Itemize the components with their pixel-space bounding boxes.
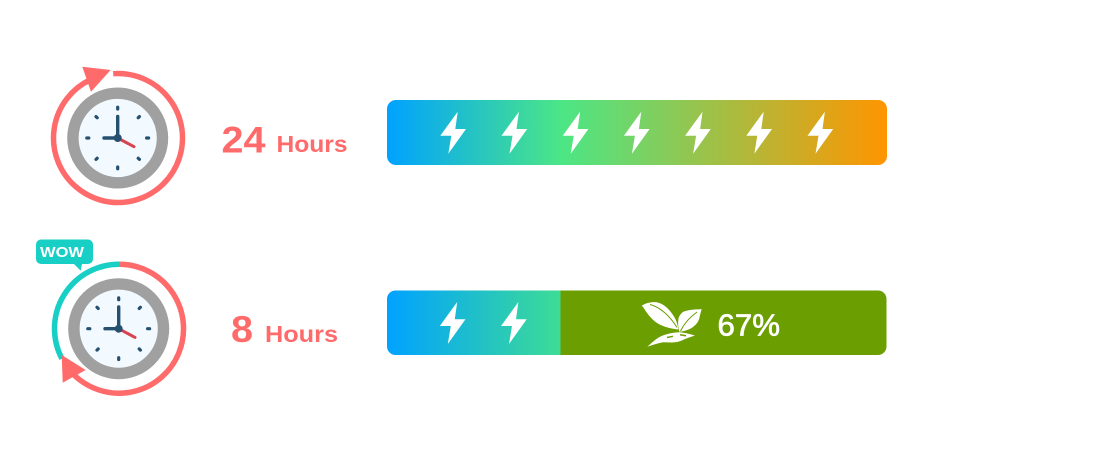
label: 8 Hours: Hours	[265, 321, 338, 347]
label: 24 Hours: Hours	[276, 131, 348, 157]
used energy segment	[387, 290, 561, 355]
label: 24 Hours: 24	[222, 118, 266, 160]
circular arrow ring	[54, 264, 184, 393]
label: 8 Hours	[231, 308, 338, 350]
saved energy segment	[560, 290, 886, 355]
clock ticks	[87, 107, 149, 169]
clock bezel	[73, 93, 162, 183]
label: 24 Hours	[222, 118, 348, 160]
clock hands	[104, 116, 134, 147]
bar: 8 hours	[387, 290, 886, 355]
icon: leaves and seed pod	[642, 302, 702, 347]
label: 67%: 67%	[718, 308, 780, 342]
lightning bolts row: 8 hours	[440, 302, 527, 344]
clock hands	[105, 307, 135, 337]
clock icon: 24 hours	[54, 67, 183, 203]
label: 8 Hours: 8	[231, 308, 253, 350]
clock icon: 8 hours	[54, 264, 184, 393]
clock ticks	[88, 298, 150, 360]
circular arrow ring	[54, 67, 183, 203]
bar: 24 hours energy gradient	[387, 100, 887, 165]
lightning bolts row: 24 hours	[440, 112, 833, 154]
WOW speech bubble: WOW	[40, 245, 84, 261]
WOW speech bubble	[36, 240, 93, 271]
clock bezel	[74, 284, 164, 374]
